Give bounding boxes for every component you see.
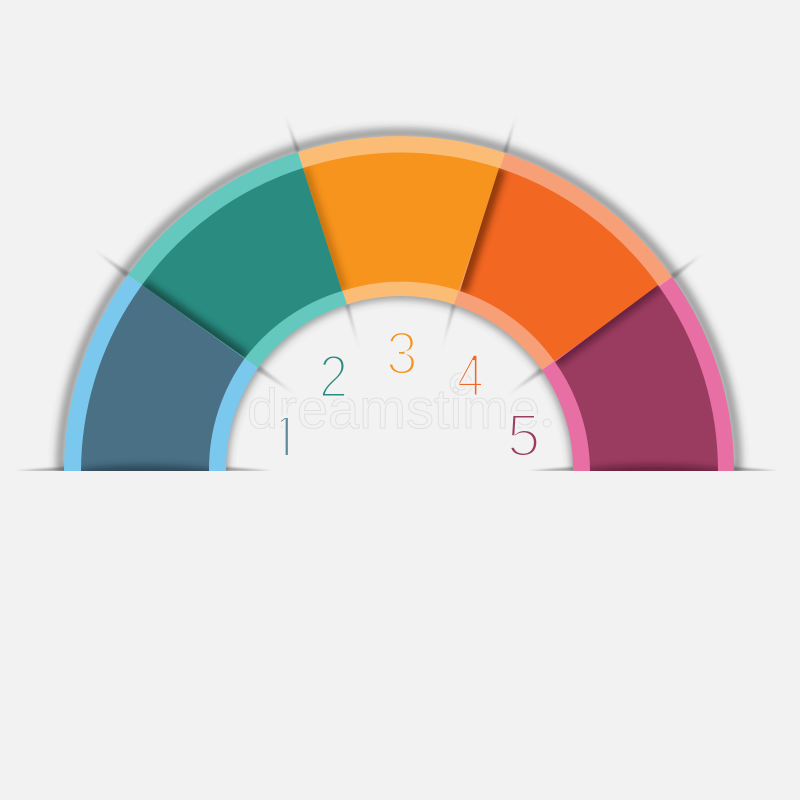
segment 5: magenta xyxy=(542,277,734,481)
segment 3: amber xyxy=(298,136,505,304)
number 1: 1 xyxy=(269,404,302,471)
watermark: dreamstime xyxy=(247,377,540,440)
radial shadow spikes xyxy=(92,112,705,397)
ring drop shadow xyxy=(61,133,737,471)
baseline shadow spikes xyxy=(15,467,778,471)
number 4: 4 xyxy=(457,342,484,409)
number 3: 3 xyxy=(386,321,418,387)
number 2: 2 xyxy=(319,343,348,410)
segment 2: teal xyxy=(128,152,347,368)
segment 1: blue xyxy=(64,275,258,481)
blank lower panel xyxy=(0,471,800,800)
segment 4: orange xyxy=(454,153,672,370)
number 5: 5 xyxy=(507,402,540,469)
